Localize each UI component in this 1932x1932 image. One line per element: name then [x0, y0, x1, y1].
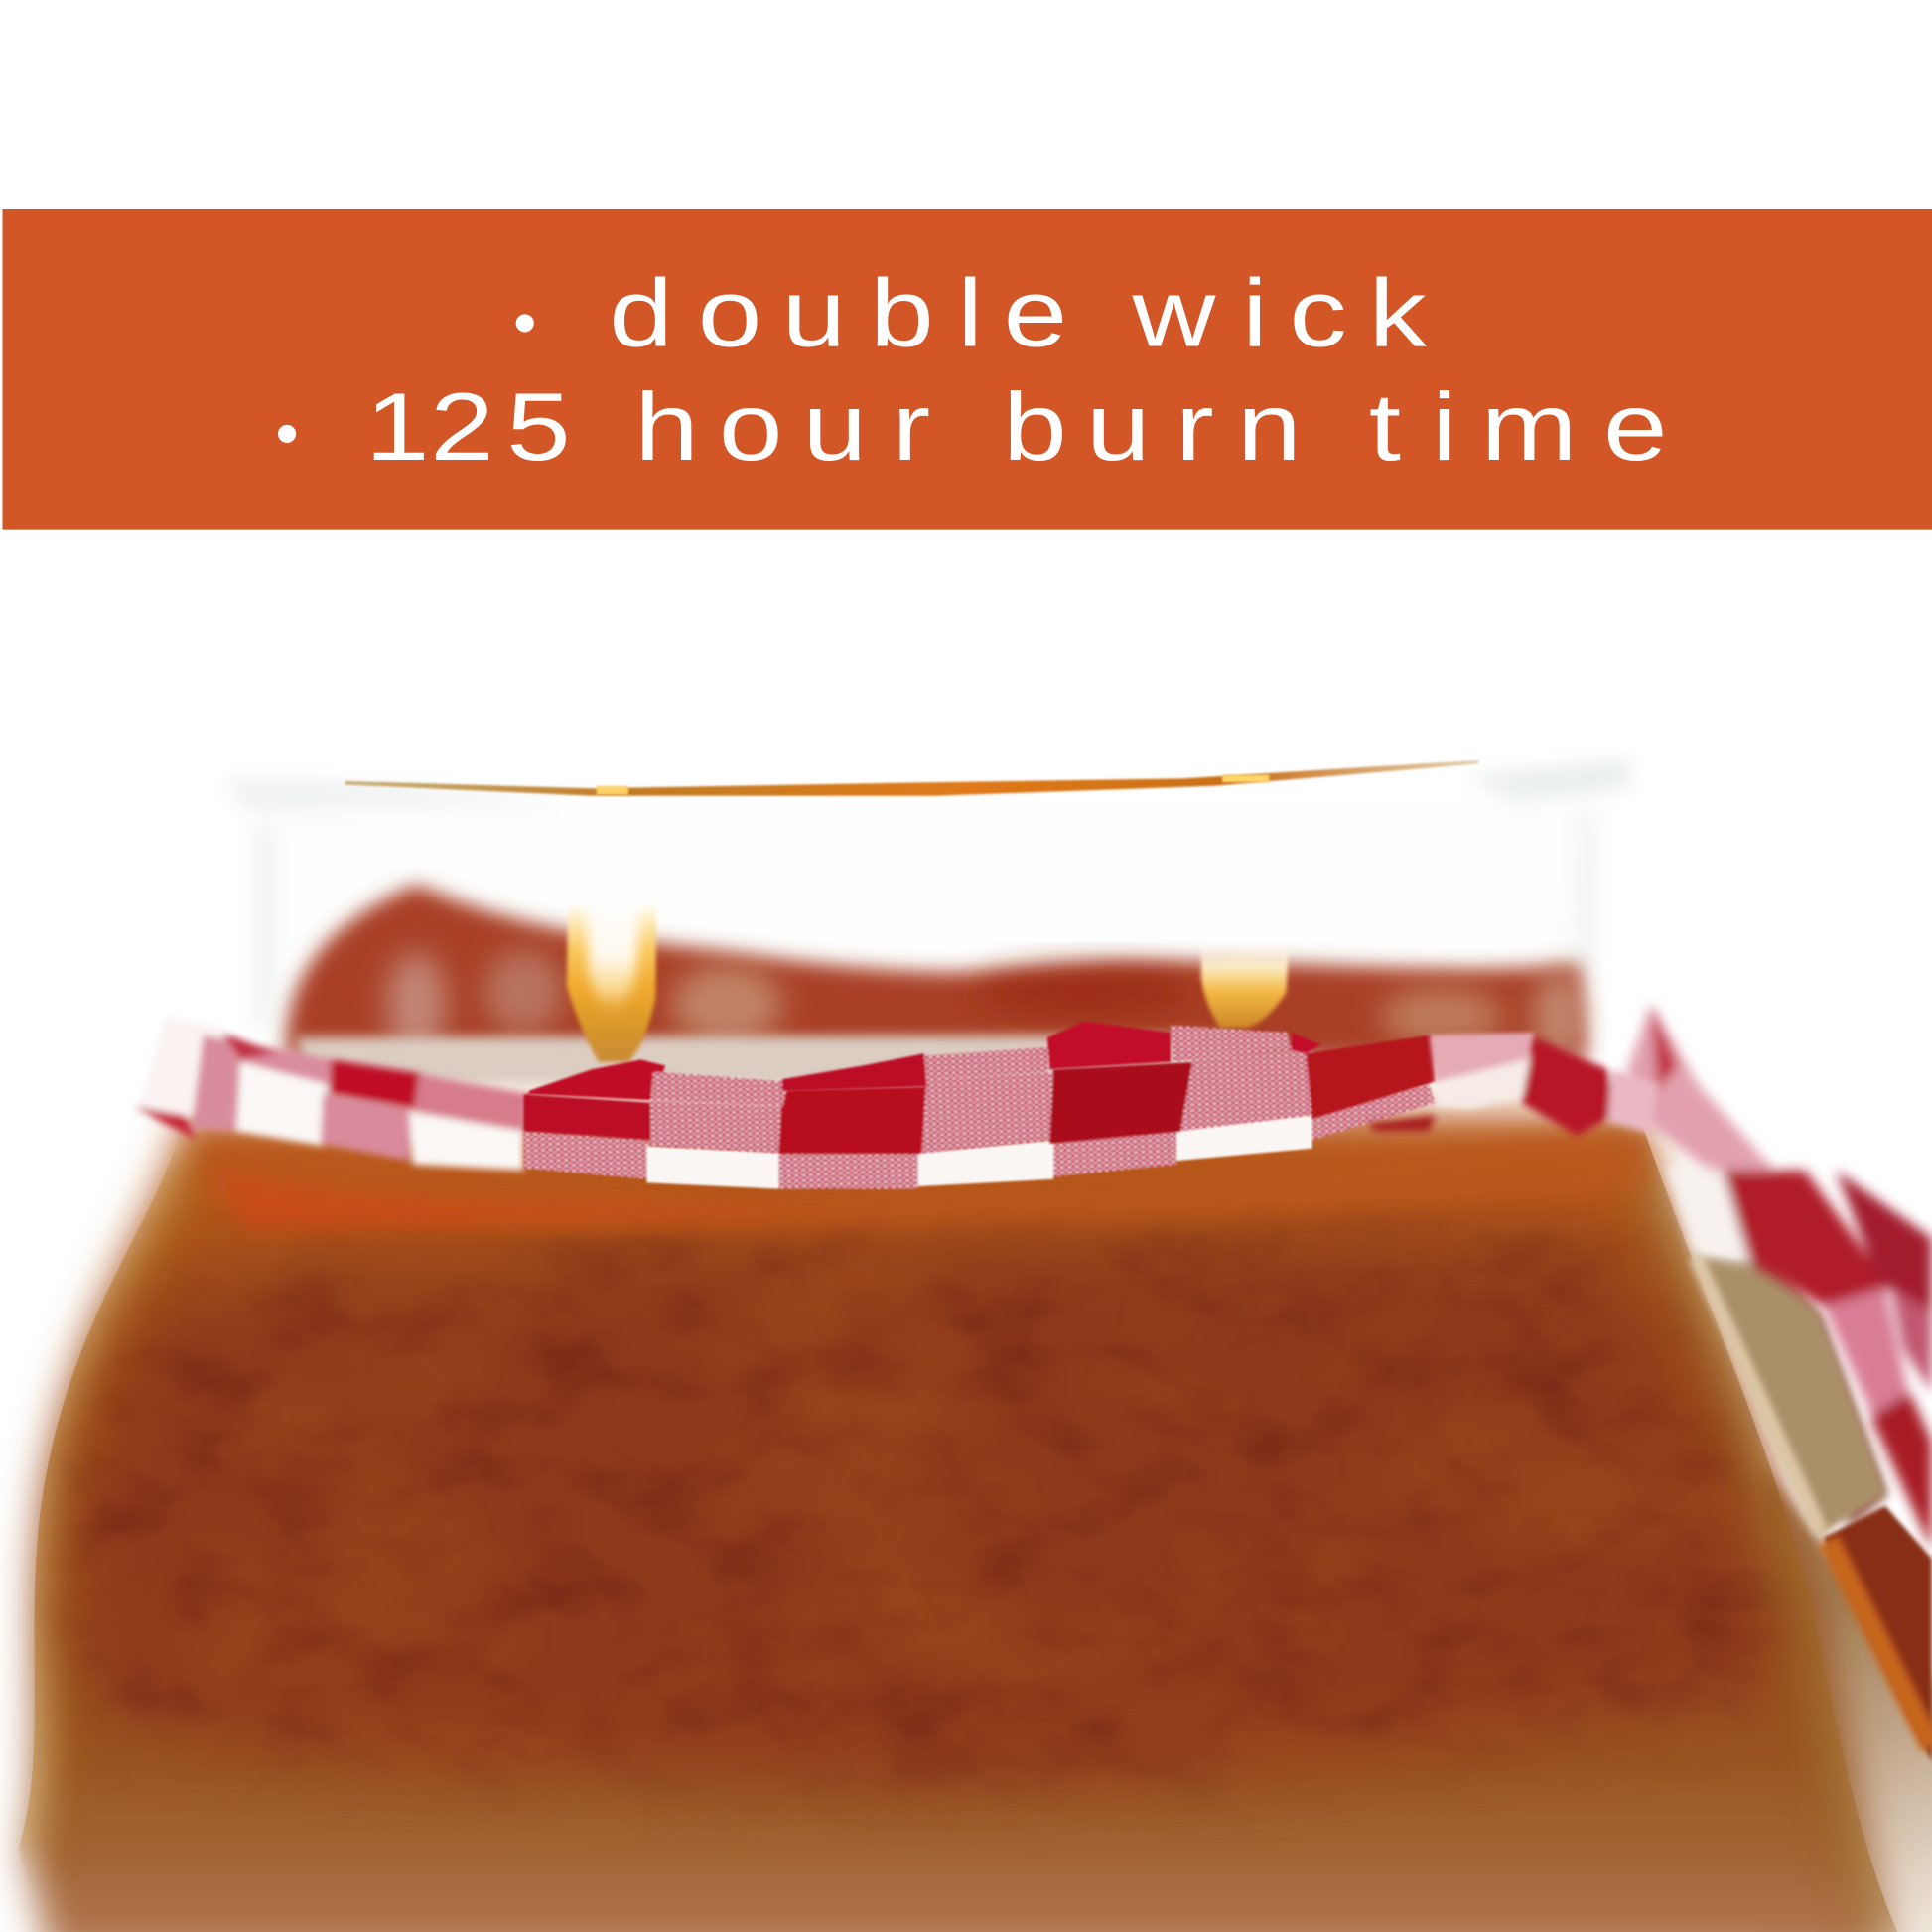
glass jar upper wall	[224, 759, 1629, 1084]
ribbon middle row	[523, 1033, 1534, 1154]
ribbon left soft section	[133, 1017, 530, 1171]
bullet: double wick: •	[513, 286, 536, 359]
bullet: burn time: •	[275, 396, 299, 471]
flame left	[567, 890, 656, 1062]
ribbon knot	[1368, 1037, 1657, 1136]
wax and reflection seen through the glass	[286, 885, 1587, 1084]
flame right	[1201, 942, 1289, 1028]
amber rim reflection	[345, 760, 1478, 796]
ribbon upper row	[527, 1022, 1320, 1106]
orange banner	[2, 209, 1932, 530]
feature: double wick: double wick	[609, 259, 1427, 367]
wax body	[0, 1109, 1932, 1932]
label strip at jar edge	[1694, 1251, 1932, 1762]
gingham ribbon tail	[1626, 1004, 1932, 1550]
gingham ribbon band	[133, 1017, 1657, 1189]
feature: 125 hour burn time: 125 hour burn time	[365, 372, 1668, 481]
cream base at lower right	[1762, 1466, 1932, 1932]
photo: candle jar	[0, 759, 1932, 1932]
ribbon lower row	[523, 1084, 1436, 1189]
